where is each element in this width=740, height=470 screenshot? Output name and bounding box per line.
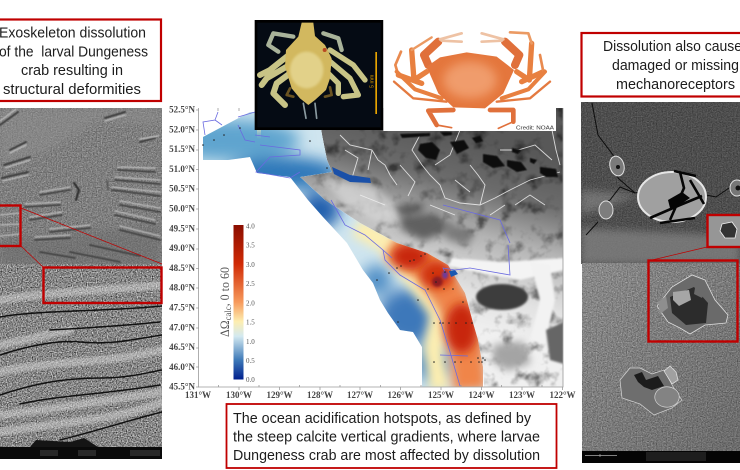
latitude axis labels: 51.5°N bbox=[169, 144, 195, 154]
photo: larval Dungeness crab: 5 mm bbox=[369, 74, 375, 88]
colour bar legend: 3.5 bbox=[246, 242, 255, 250]
photo: adult Dungeness crab bbox=[383, 20, 556, 132]
colour bar legend: 0.5 bbox=[246, 357, 255, 365]
latitude axis labels: 46.0°N bbox=[169, 362, 195, 372]
photo: larval Dungeness crab bbox=[255, 20, 383, 130]
longitude axis labels: 130°W bbox=[226, 390, 252, 400]
latitude axis labels: 46.5°N bbox=[169, 342, 195, 352]
longitude axis labels: 122°W bbox=[549, 390, 576, 400]
longitude axis labels: 127°W bbox=[347, 390, 373, 400]
longitude axis labels: 125°W bbox=[428, 390, 454, 400]
colour bar legend: ΔΩ bbox=[218, 320, 232, 337]
longitude axis labels bbox=[185, 390, 576, 400]
colour bar legend: 1.5 bbox=[246, 318, 255, 326]
latitude axis labels: 50.0°N bbox=[169, 204, 195, 214]
bottom callout: ocean acidification hotspots: The ocean acidification hotspots, as defined by bbox=[233, 410, 531, 427]
colour bar legend bbox=[218, 222, 255, 384]
inset marker: right small red box bbox=[708, 215, 740, 247]
crystal detail inset bbox=[657, 275, 728, 334]
latitude axis labels: 45.5°N bbox=[169, 382, 195, 392]
depth contour lines bbox=[203, 112, 510, 386]
longitude axis labels: 128°W bbox=[307, 390, 333, 400]
bottom callout: ocean acidification hotspots bbox=[226, 404, 556, 468]
longitude axis labels: 124°W bbox=[468, 390, 495, 400]
photo: adult Dungeness crab: Credit: NOAA bbox=[516, 126, 554, 132]
colour bar legend: 4.0 bbox=[246, 222, 255, 230]
longitude axis labels: 126°W bbox=[387, 390, 414, 400]
SEM image: exoskeleton close-up bbox=[0, 264, 162, 459]
latitude axis labels bbox=[169, 104, 195, 392]
latitude axis labels: 52.5°N bbox=[169, 104, 195, 114]
zoom connector lines bbox=[21, 208, 162, 267]
colour bar legend: 1.0 bbox=[246, 338, 255, 346]
latitude axis labels: 48.0°N bbox=[169, 283, 195, 293]
colour bar legend: 2.5 bbox=[246, 280, 255, 288]
colour bar legend: , 0 to 60 bbox=[218, 267, 232, 306]
colour bar legend: 0.0 bbox=[246, 376, 255, 384]
left callout: exoskeleton dissolution bbox=[0, 20, 161, 101]
latitude axis labels: 47.5°N bbox=[169, 302, 195, 312]
SEM image: damaged mechanoreceptor overview bbox=[581, 102, 740, 264]
colour bar legend: 3.0 bbox=[246, 261, 255, 269]
inset marker: large red box bbox=[44, 268, 162, 303]
left callout: exoskeleton dissolution: crab resulting in bbox=[21, 62, 123, 79]
SEM image: exoskeleton surface overview bbox=[0, 108, 162, 266]
latitude axis labels: 49.5°N bbox=[169, 223, 195, 233]
longitude axis labels: 123°W bbox=[509, 390, 535, 400]
bottom callout: ocean acidification hotspots: Dungeness crab are most affected by dissolution bbox=[233, 447, 540, 464]
map frame and terrain bbox=[300, 108, 564, 387]
longitude axis labels: 129°W bbox=[266, 390, 293, 400]
left callout: exoskeleton dissolution: structural deformities bbox=[3, 81, 141, 98]
longitude axis labels: 131°W bbox=[185, 390, 211, 400]
latitude axis labels: 51.0°N bbox=[169, 164, 195, 174]
SEM image: damaged mechanoreceptor close-up bbox=[582, 263, 740, 463]
right callout: mechanoreceptors: mechanoreceptors bbox=[616, 76, 735, 93]
zoom connector line bbox=[648, 247, 707, 261]
latitude axis labels: 50.5°N bbox=[169, 184, 195, 194]
left callout: exoskeleton dissolution: of the larval Dungeness bbox=[0, 44, 148, 60]
colour bar legend: 2.0 bbox=[246, 300, 255, 308]
ocean calcite gradient surface bbox=[203, 112, 483, 387]
survey station markers bbox=[202, 127, 486, 363]
map axes and tick marks bbox=[196, 108, 563, 390]
inset marker: right large red box bbox=[648, 260, 738, 342]
colour bar legend: calc bbox=[223, 306, 233, 320]
inset marker: small red box bbox=[0, 206, 20, 246]
right callout: mechanoreceptors bbox=[582, 33, 740, 96]
latitude axis labels: 48.5°N bbox=[169, 263, 195, 273]
latitude axis labels: 49.0°N bbox=[169, 243, 195, 253]
left callout: exoskeleton dissolution: Exoskeleton dissolution bbox=[0, 24, 146, 42]
Strait of Georgia / Juan de Fuca blue patches bbox=[332, 167, 458, 277]
latitude axis labels: 47.0°N bbox=[169, 322, 195, 332]
bottom callout: ocean acidification hotspots: the steep calcite vertical gradients, where larvae bbox=[233, 428, 540, 446]
latitude axis labels: 52.0°N bbox=[169, 124, 195, 134]
